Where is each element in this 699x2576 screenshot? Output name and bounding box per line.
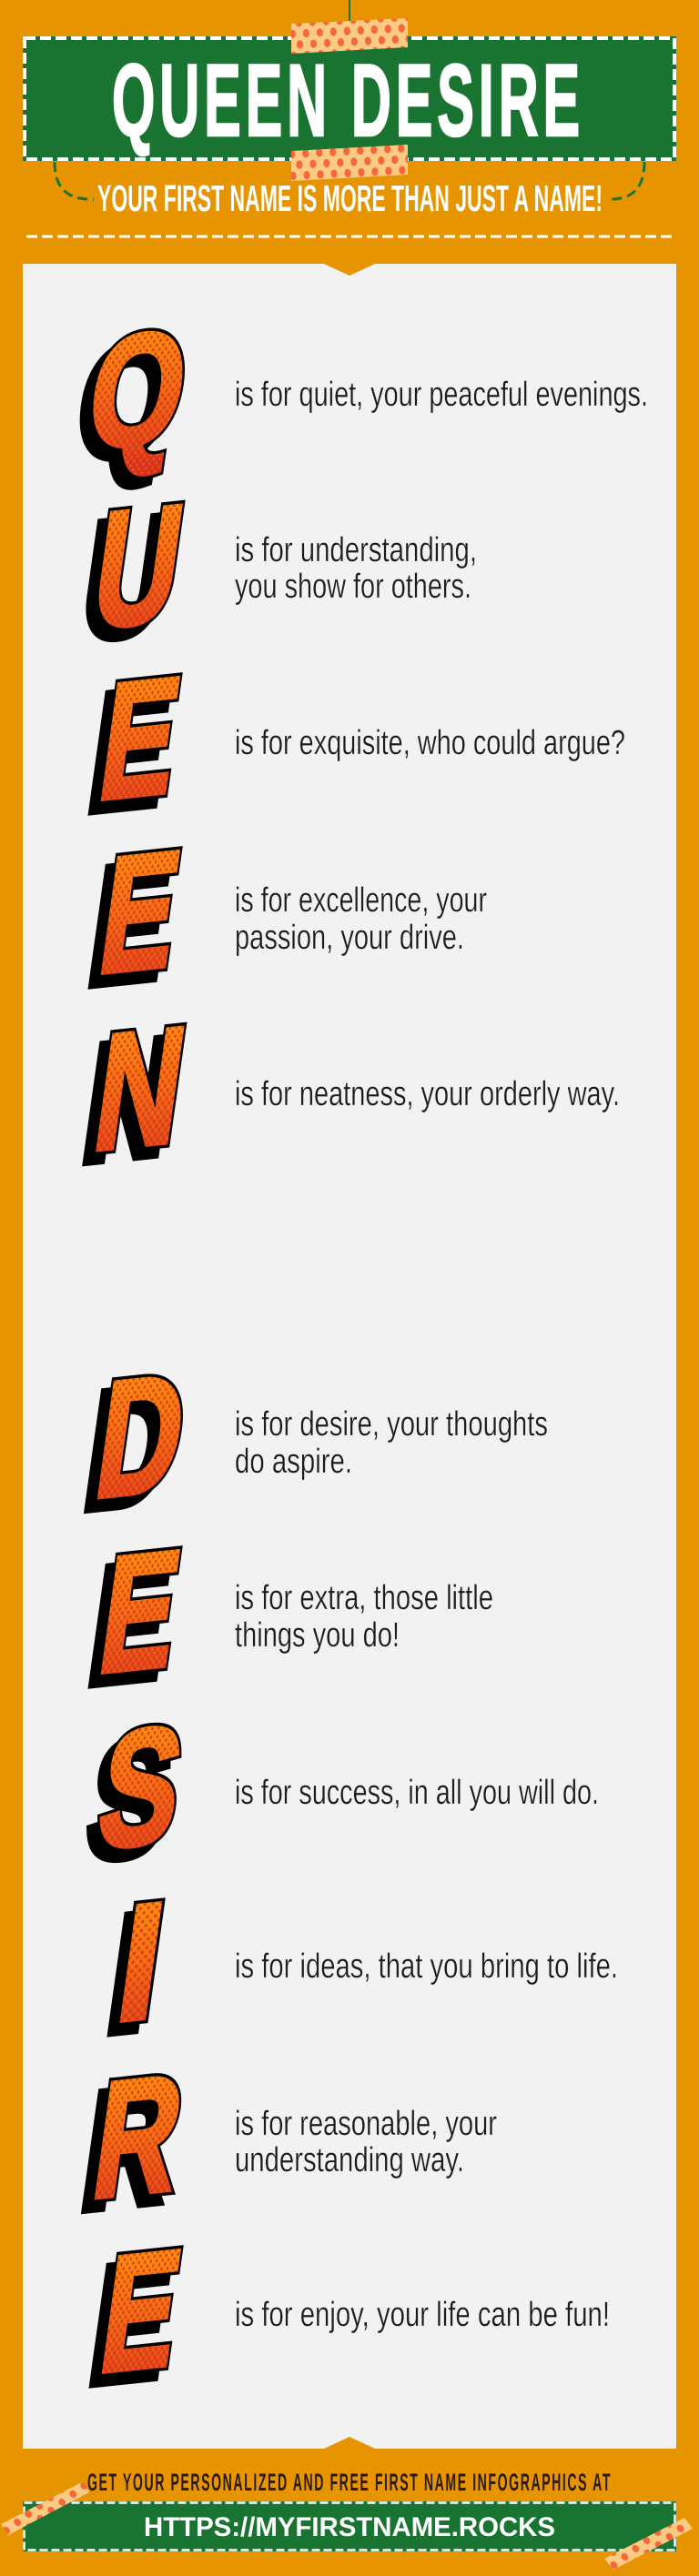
letter E: E <box>90 1515 190 1709</box>
letter R: R <box>84 2038 193 2234</box>
tape: footer right <box>604 2518 693 2570</box>
letter I: I <box>106 1867 175 2058</box>
letter N: N <box>85 991 196 1186</box>
dashed connector: right <box>608 162 644 199</box>
text: E <box>235 881 487 957</box>
letter D: D <box>86 1338 196 1534</box>
letter E: E <box>90 642 190 836</box>
letter E: E <box>91 2215 191 2409</box>
letter U: U <box>84 468 193 664</box>
text: R: understanding way. <box>235 2141 464 2179</box>
letter E: E <box>90 816 190 1010</box>
text: E: things you do! <box>235 1616 400 1655</box>
text: R: is for reasonable, your <box>235 2105 497 2143</box>
letter D: D <box>76 1349 185 1545</box>
text: E: is for excellence, your <box>235 881 487 920</box>
letter D: D <box>86 1338 196 1534</box>
letter U: U <box>73 479 182 675</box>
letter R: R <box>73 2049 182 2245</box>
letter Q: Q <box>67 307 186 495</box>
letter Q: Q <box>78 297 198 484</box>
letter E: E <box>90 1515 190 1709</box>
title banner <box>23 36 676 161</box>
dashed connector: left <box>55 162 94 199</box>
letter U: U <box>84 468 193 664</box>
letter R: R <box>84 2038 193 2234</box>
letter R: R <box>84 2038 193 2234</box>
letter D: D <box>86 1338 196 1534</box>
letter E <box>89 2245 184 2389</box>
letter S: S <box>89 1689 193 1885</box>
footer banner <box>23 2501 676 2551</box>
letter E: E <box>90 642 190 836</box>
letter E: E <box>90 642 190 836</box>
letter E: E <box>90 1515 190 1709</box>
letter E: E <box>91 2215 191 2409</box>
letter E <box>87 846 183 990</box>
letter D <box>84 1374 183 1514</box>
tape: footer left <box>1 2481 89 2535</box>
tape: top <box>291 18 408 54</box>
letter S: S <box>89 1689 193 1885</box>
letter E <box>87 1545 183 1689</box>
letter E: E <box>80 827 179 1021</box>
letter E: E <box>81 2226 180 2420</box>
content panel <box>23 264 676 2449</box>
text: E: passion, your drive. <box>235 919 464 957</box>
letter U <box>86 500 186 642</box>
text: U <box>235 531 477 606</box>
letter D: D <box>86 1338 196 1534</box>
tape: bottom <box>291 145 408 181</box>
letter E <box>87 672 183 816</box>
letter U: U <box>84 468 193 664</box>
header string <box>349 0 350 24</box>
letter U: U <box>84 468 193 664</box>
letter E: E <box>91 2215 191 2409</box>
text: E: is for extra, those little <box>235 1579 493 1617</box>
letter E: E <box>90 1515 190 1709</box>
letter N: N <box>85 991 196 1186</box>
letter Q: Q <box>78 297 198 484</box>
letter S: S <box>89 1689 193 1885</box>
letter E: E <box>91 2215 191 2409</box>
text: D <box>235 1405 548 1481</box>
letter E: E <box>90 642 190 836</box>
letter S: S <box>78 1700 182 1896</box>
text: D: do aspire. <box>235 1443 352 1481</box>
letter S: S <box>89 1689 193 1885</box>
letter Q: Q <box>78 297 198 484</box>
letter R: R <box>84 2038 193 2234</box>
letter R <box>80 2073 182 2214</box>
letter I: I <box>106 1867 175 2058</box>
letter E: E <box>80 1526 179 1720</box>
letter N <box>82 1022 187 1166</box>
letter E: E <box>80 653 179 847</box>
letter N: N <box>74 1001 185 1197</box>
letter N: N <box>85 991 196 1186</box>
letter I: I <box>106 1867 175 2058</box>
letter Q: Q <box>78 297 198 484</box>
letter I <box>106 1897 166 2038</box>
text: D: is for desire, your thoughts <box>235 1405 548 1444</box>
letter E: E <box>90 816 190 1010</box>
letter E: E <box>90 816 190 1010</box>
text: R <box>235 2105 497 2179</box>
letter E: E <box>90 816 190 1010</box>
text: U: is for understanding, <box>235 531 477 569</box>
footer url: HTTPS://MYFIRSTNAME.ROCKS <box>144 2512 555 2542</box>
letter I: I <box>97 1878 166 2068</box>
letter I: I <box>106 1867 175 2058</box>
letter S <box>86 1723 182 1863</box>
text: U: you show for others. <box>235 568 471 606</box>
text: E <box>235 1579 493 1655</box>
letter N: N <box>85 991 196 1186</box>
